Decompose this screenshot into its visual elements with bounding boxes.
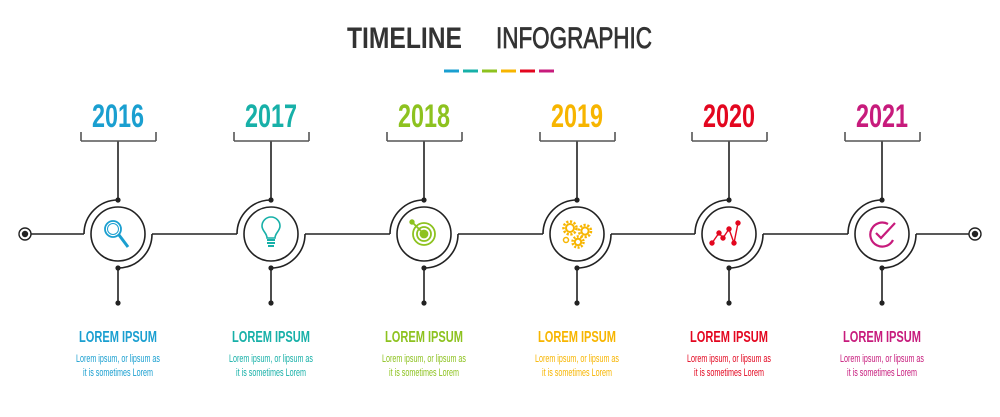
step 2018: LOREM IPSUM	[385, 329, 463, 346]
step 2021: it is sometimes Lorem	[847, 367, 917, 379]
step 2018: it is sometimes Lorem	[389, 367, 459, 379]
title: TIMELINE	[347, 22, 462, 55]
endpoint right	[969, 228, 981, 240]
step 2021: 2021	[856, 98, 908, 134]
step 2017: Lorem ipsum, or lipsum as	[229, 353, 313, 365]
icon: bulb	[262, 217, 280, 246]
step 2016: LOREM IPSUM	[79, 329, 157, 346]
step 2020: it is sometimes Lorem	[694, 367, 764, 379]
step 2021: LOREM IPSUM	[843, 329, 921, 346]
icon: target	[410, 220, 435, 245]
step 2021	[840, 98, 924, 379]
step 2019: LOREM IPSUM	[538, 329, 616, 346]
step 2017	[229, 98, 313, 379]
endpoint left	[19, 228, 31, 240]
step 2019: it is sometimes Lorem	[542, 367, 612, 379]
icon: check	[870, 223, 895, 247]
step 2016: 2016	[92, 98, 144, 134]
step 2019: Lorem ipsum, or lipsum as	[535, 353, 619, 365]
step 2020: 2020	[703, 98, 755, 134]
step 2018: 2018	[398, 98, 450, 134]
color bars	[444, 70, 554, 72]
step 2016: it is sometimes Lorem	[83, 367, 153, 379]
step 2017: LOREM IPSUM	[232, 329, 310, 346]
step 2018: Lorem ipsum, or lipsum as	[382, 353, 466, 365]
step 2020	[687, 98, 771, 379]
step 2016: Lorem ipsum, or lipsum as	[76, 353, 160, 365]
step 2017: 2017	[245, 98, 297, 134]
icon: chart	[710, 221, 740, 245]
step 2020: Lorem ipsum, or lipsum as	[687, 353, 771, 365]
icon: magnifier	[105, 221, 128, 247]
step 2019	[535, 98, 619, 379]
step 2016	[76, 98, 160, 379]
step 2018	[382, 98, 466, 379]
timeline line	[25, 233, 975, 235]
step 2019: 2019	[551, 98, 603, 134]
title: INFOGRAPHIC	[496, 22, 652, 55]
icon: gears	[564, 222, 591, 248]
step 2017: it is sometimes Lorem	[236, 367, 306, 379]
title	[347, 22, 652, 55]
step 2021: Lorem ipsum, or lipsum as	[840, 353, 924, 365]
step 2020: LOREM IPSUM	[690, 329, 768, 346]
